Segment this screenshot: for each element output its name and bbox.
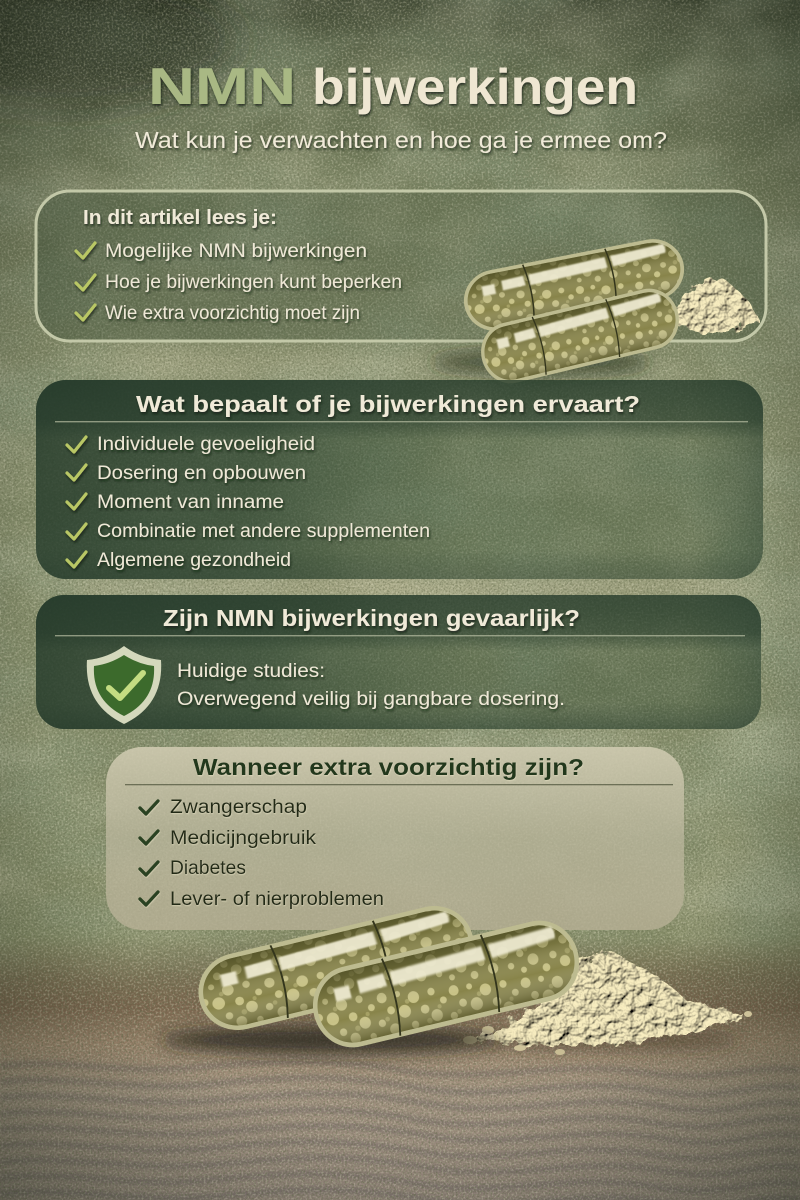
- capsules: top pair: [430, 234, 689, 389]
- checklist: factoren: [67, 434, 430, 571]
- panel: wat bepaalt: [36, 380, 763, 579]
- heading: gevaarlijk: Zijn NMN bijwerkingen gevaarlijk?: [163, 605, 580, 631]
- heading: extra voorzichtig: Wanneer extra voorzichtig zijn?: [193, 754, 584, 780]
- text: huidige studies: Overwegend veilig bij gangbare dosering.: [177, 689, 565, 710]
- title: [148, 58, 638, 116]
- text: huidige studies: [177, 661, 565, 710]
- checklist: voorzichtig: Diabetes: [170, 858, 246, 879]
- checklist: voorzichtig: Medicijngebruik: [170, 828, 317, 849]
- panel: in dit artikel lees je: [36, 191, 766, 341]
- checklist: voorzichtig: Zwangerschap: [170, 797, 307, 818]
- checklist: artikel topics: Mogelijke NMN bijwerkingen: [105, 241, 367, 262]
- panel: gevaarlijk: [36, 595, 761, 729]
- checklist: factoren: Algemene gezondheid: [97, 550, 291, 571]
- checklist: artikel topics: [76, 241, 402, 324]
- title: NMN: [148, 58, 296, 116]
- title: bijwerkingen: [312, 59, 638, 115]
- checklist: artikel topics: Wie extra voorzichtig moet zijn: [105, 303, 360, 324]
- heading: wat bepaalt: Wat bepaalt of je bijwerkingen ervaart?: [136, 391, 640, 417]
- checklist: artikel topics: Hoe je bijwerkingen kunt beperken: [105, 272, 402, 293]
- checklist: voorzichtig: Lever- of nierproblemen: [170, 889, 384, 910]
- checklist: voorzichtig: [140, 797, 384, 910]
- capsules: bottom pair: [160, 898, 587, 1055]
- powder: bottom pile: [463, 951, 752, 1055]
- subtitle: Wat kun je verwachten en hoe ga je ermee om?: [135, 127, 667, 153]
- checklist: factoren: Combinatie met andere supplementen: [97, 521, 430, 542]
- powder: top pile: [672, 276, 758, 333]
- checklist: factoren: Dosering en opbouwen: [97, 463, 306, 484]
- checklist: factoren: Individuele gevoeligheid: [97, 434, 315, 455]
- icon: shield with check: [87, 646, 161, 724]
- heading: in dit artikel: In dit artikel lees je:: [83, 207, 277, 229]
- panel: extra voorzichtig: [106, 747, 684, 930]
- checklist: factoren: Moment van inname: [97, 492, 284, 513]
- text: huidige studies: Huidige studies:: [177, 661, 325, 682]
